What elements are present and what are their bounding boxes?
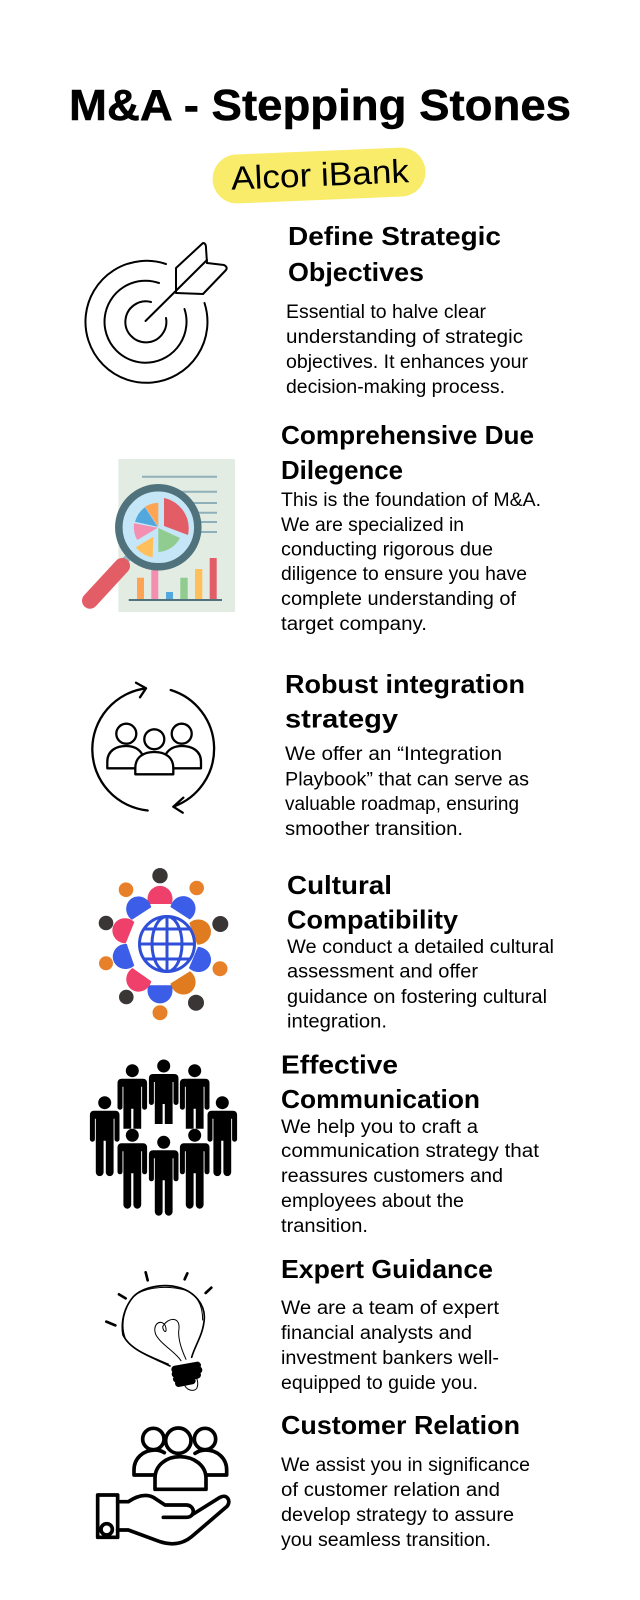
icon: target with dart — [85, 243, 227, 383]
icon: globe with people — [99, 868, 228, 1020]
body text: Playbook” that can serve as — [285, 770, 529, 790]
body text — [281, 1298, 500, 1394]
body text: assessment and offer — [287, 962, 479, 982]
body text: We assist you in significance — [281, 1455, 530, 1476]
body text: reassures customers and — [281, 1166, 503, 1187]
icon: group of people — [90, 1060, 237, 1216]
section: cultural compatibility — [99, 868, 554, 1032]
body text: valuable roadmap, ensuring — [285, 794, 519, 815]
body text: financial analysts and — [281, 1323, 472, 1344]
body text: We are specialized in — [281, 515, 464, 536]
icon: hand holding people — [98, 1428, 229, 1544]
heading — [285, 669, 525, 734]
body text: understanding of strategic — [286, 327, 523, 348]
body text: This is the foundation of M&A. — [281, 490, 541, 511]
title: M&A - Stepping Stones — [69, 81, 571, 130]
heading: Dilegence — [281, 455, 403, 485]
body text: employees about the — [281, 1191, 464, 1212]
heading: Cultural — [287, 870, 392, 900]
body text: We offer an “Integration — [285, 744, 502, 765]
body text: guidance on fostering cultural — [287, 987, 547, 1008]
section: expert guidance — [106, 1254, 500, 1394]
subtitle pill: Alcor iBank — [212, 147, 426, 204]
body text — [281, 1117, 540, 1237]
heading: Communication — [281, 1084, 480, 1114]
body text — [287, 937, 554, 1032]
body text: Essential to halve clear — [286, 302, 487, 323]
heading: Comprehensive Due — [281, 420, 534, 450]
heading: Customer Relation — [281, 1410, 520, 1440]
heading: Objectives — [288, 257, 424, 287]
body text: diligence to ensure you have — [281, 564, 527, 585]
body text — [281, 1455, 530, 1551]
heading: Effective — [281, 1050, 398, 1080]
body text: decision-making process. — [286, 377, 505, 398]
body text — [285, 744, 529, 840]
body text — [281, 490, 541, 635]
body text: smoother transition. — [285, 819, 463, 840]
heading — [288, 221, 501, 287]
body text: investment bankers well- — [281, 1348, 499, 1369]
body text: integration. — [287, 1012, 387, 1032]
body text: transition. — [281, 1216, 368, 1237]
body text — [286, 302, 529, 398]
body text: We help you to craft a — [281, 1117, 478, 1138]
heading — [287, 870, 459, 935]
body text: equipped to guide you. — [281, 1373, 478, 1394]
body text: of customer relation and — [281, 1480, 500, 1501]
body text: conducting rigorous due — [281, 540, 493, 560]
heading: Expert Guidance — [281, 1254, 493, 1284]
body text: complete understanding of — [281, 589, 517, 610]
body text: target company. — [281, 614, 427, 635]
body text: you seamless transition. — [281, 1530, 491, 1551]
heading: strategy — [285, 704, 399, 734]
heading: Compatibility — [287, 905, 459, 935]
section: robust integration strategy — [92, 669, 529, 840]
heading — [281, 420, 534, 485]
body text: We are a team of expert — [281, 1298, 500, 1319]
body text: develop strategy to assure — [281, 1505, 514, 1526]
body text: communication strategy that — [281, 1141, 540, 1162]
section: effective communication — [90, 1050, 540, 1237]
icon: team in cycle arrows — [92, 683, 214, 813]
heading — [281, 1050, 480, 1114]
icon: report with magnifier — [90, 459, 235, 612]
icon: hand-drawn light bulb — [106, 1272, 211, 1390]
body text: We conduct a detailed cultural — [287, 937, 554, 958]
heading: Define Strategic — [288, 221, 501, 251]
subtitle pill: Alcor iBank: Alcor iBank — [230, 152, 410, 197]
body text: objectives. It enhances your — [286, 352, 529, 373]
heading: Robust integration — [285, 669, 525, 699]
section: comprehensive due diligence — [90, 420, 541, 635]
section: define strategic objectives — [85, 221, 529, 398]
section: customer relation — [98, 1410, 530, 1551]
